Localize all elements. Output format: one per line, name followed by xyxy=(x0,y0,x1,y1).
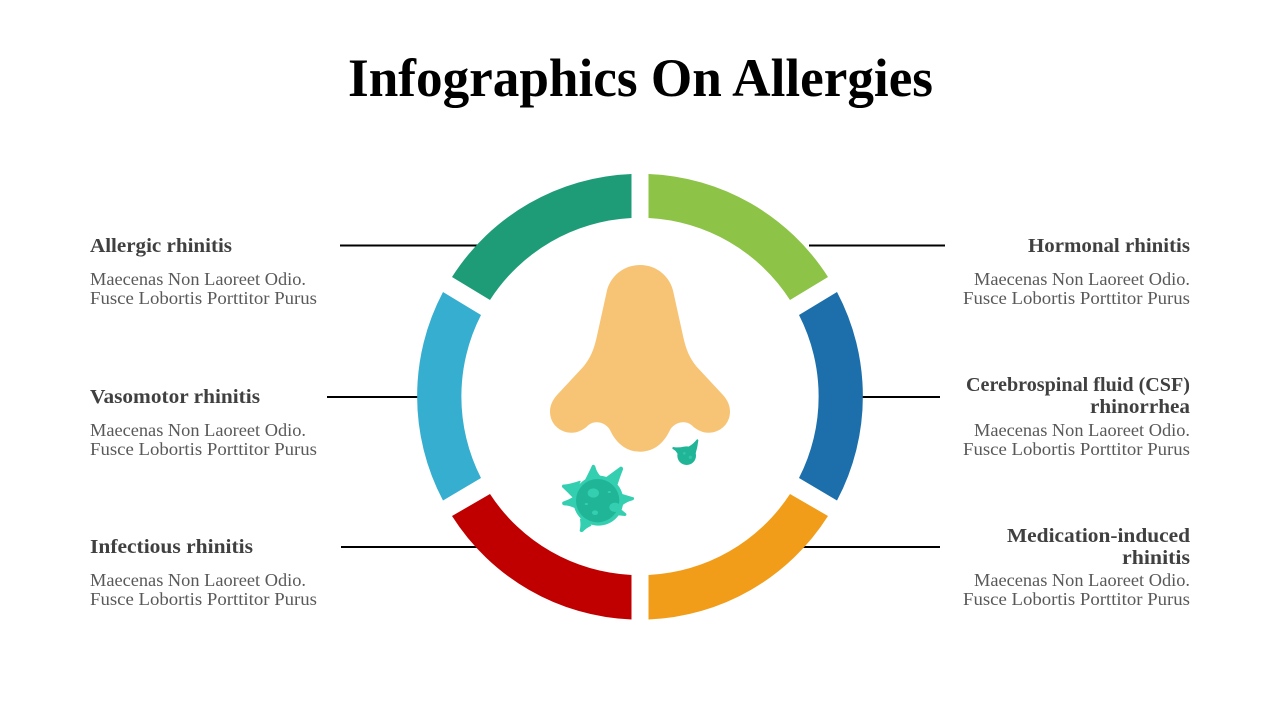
text block: infectious rhinitis: Infectious rhinitis xyxy=(90,536,253,558)
text block: medication-induced rhinitis: Medication-induced xyxy=(1007,525,1191,547)
icon: large virus xyxy=(563,465,633,531)
text block: vasomotor rhinitis xyxy=(90,386,317,459)
text block: CSF rhinorrhea: Fusce Lobortis Porttitor Purus xyxy=(963,439,1190,459)
text block: medication-induced rhinitis: Fusce Lobortis Porttitor Purus xyxy=(963,589,1190,609)
text block: medication-induced rhinitis: Maecenas Non Laoreet Odio. xyxy=(974,570,1190,590)
text block: allergic rhinitis: Allergic rhinitis xyxy=(90,235,232,257)
connector: allergic rhinitis xyxy=(340,244,480,246)
segment: light blue xyxy=(417,292,481,500)
text block: hormonal rhinitis: Maecenas Non Laoreet Odio. xyxy=(974,269,1190,289)
connector: CSF rhinorrhea xyxy=(860,396,940,398)
connector: vasomotor rhinitis xyxy=(327,396,420,398)
connector: medication-induced rhinitis xyxy=(800,546,940,548)
text block: infectious rhinitis: Fusce Lobortis Porttitor Purus xyxy=(90,589,317,609)
text block: infectious rhinitis: Maecenas Non Laoreet Odio. xyxy=(90,570,306,590)
icon: nose xyxy=(550,265,730,452)
text block: hormonal rhinitis xyxy=(963,235,1190,308)
text block: medication-induced rhinitis xyxy=(963,525,1191,609)
segment: dark blue xyxy=(799,292,863,500)
segment: light green xyxy=(648,174,828,300)
text block: CSF rhinorrhea: Maecenas Non Laoreet Odio. xyxy=(974,420,1190,440)
text block: hormonal rhinitis: Fusce Lobortis Porttitor Purus xyxy=(963,288,1190,308)
connector: hormonal rhinitis xyxy=(809,244,945,246)
text block: medication-induced rhinitis: rhinitis xyxy=(1122,547,1190,569)
ring chart xyxy=(417,174,863,620)
text block: allergic rhinitis xyxy=(90,235,317,308)
text block: CSF rhinorrhea xyxy=(963,374,1190,459)
connector: infectious rhinitis xyxy=(341,546,480,548)
text block: vasomotor rhinitis: Vasomotor rhinitis xyxy=(90,386,260,408)
text block: allergic rhinitis: Maecenas Non Laoreet Odio. xyxy=(90,269,306,289)
segment: red xyxy=(452,494,632,620)
text block: vasomotor rhinitis: Fusce Lobortis Porttitor Purus xyxy=(90,439,317,459)
text block: vasomotor rhinitis: Maecenas Non Laoreet Odio. xyxy=(90,420,306,440)
text block: infectious rhinitis xyxy=(90,536,317,609)
text block: allergic rhinitis: Fusce Lobortis Porttitor Purus xyxy=(90,288,317,308)
icon: small virus xyxy=(672,439,698,465)
text block: CSF rhinorrhea: rhinorrhea xyxy=(1090,396,1190,418)
segment: dark green xyxy=(452,174,632,300)
title: Infographics On Allergies xyxy=(348,48,933,108)
segment: orange xyxy=(648,494,828,620)
text block: hormonal rhinitis: Hormonal rhinitis xyxy=(1028,235,1190,257)
text block: CSF rhinorrhea: Cerebrospinal fluid (CSF) xyxy=(966,374,1190,396)
